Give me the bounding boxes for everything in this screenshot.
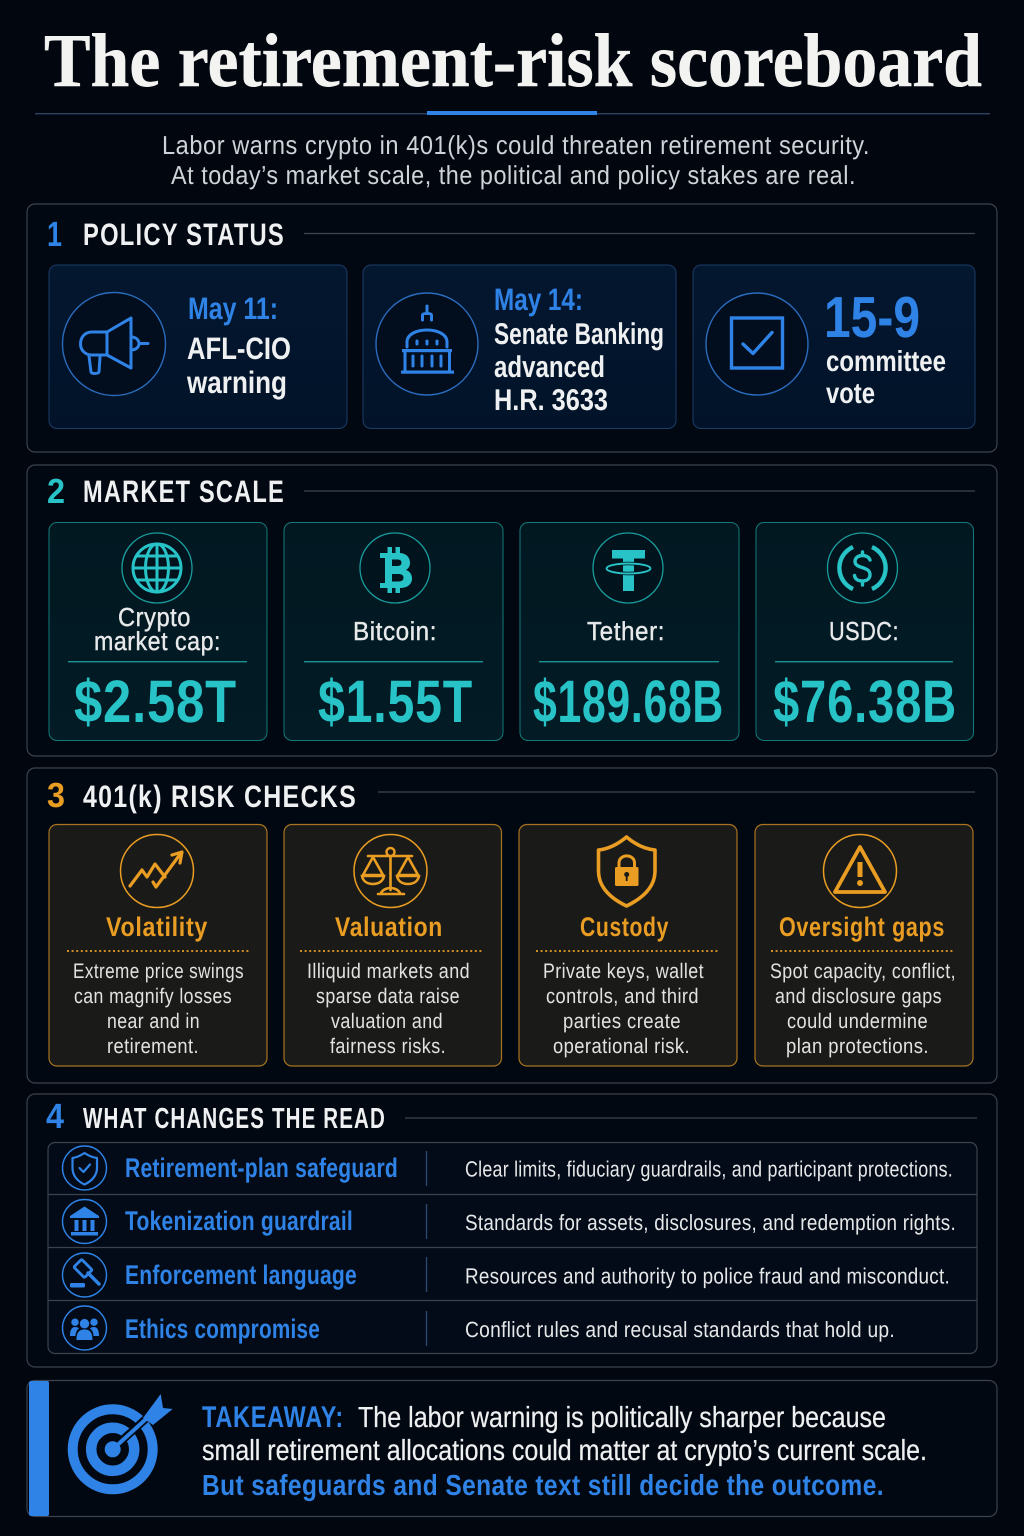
row: tokenization guardrail	[62, 1200, 956, 1244]
row: enforcement language	[62, 1253, 950, 1297]
card: volatility: near and in	[107, 1010, 200, 1033]
panel: market scale	[27, 465, 997, 756]
heading: risk checks	[47, 776, 975, 815]
card: 15-9 committee vote: vote	[826, 378, 875, 410]
card: valuation	[284, 824, 502, 1066]
title divider with blue accent	[35, 111, 990, 115]
card: crypto market cap: market cap:	[94, 626, 221, 656]
card: tether	[520, 522, 739, 740]
row: ethics compromise: Conflict rules and recusal standards that hold up.	[465, 1317, 895, 1342]
icon: megaphone	[62, 292, 166, 396]
card: crypto market cap: Crypto	[118, 602, 191, 632]
icon: gavel	[62, 1253, 106, 1297]
row: tokenization guardrail: Tokenization guardrail	[125, 1206, 353, 1236]
icon: balance scale	[354, 834, 427, 908]
card: May 11 AFL-CIO warning: May 11:	[188, 291, 278, 326]
heading: market scale	[47, 472, 975, 511]
card: custody: operational risk.	[553, 1035, 690, 1058]
accent bar	[29, 1381, 49, 1516]
subtitle: At today’s market scale, the political and policy stakes are real.	[171, 160, 856, 190]
takeaway text: TAKEAWAY:	[202, 1401, 344, 1434]
card: May 11 AFL-CIO warning: AFL-CIO	[187, 331, 291, 366]
row: retirement-plan safeguard: Retirement-plan safeguard	[125, 1153, 398, 1183]
card: valuation: fairness risks.	[330, 1035, 446, 1058]
row: enforcement language: Resources and authority to police fraud and misconduct.	[465, 1264, 950, 1288]
card: May 14 Senate Banking: H.R. 3633	[494, 384, 608, 417]
card: tether: Tether:	[587, 616, 665, 646]
card: 15-9 committee vote	[693, 265, 975, 428]
card: volatility	[49, 824, 267, 1066]
card: crypto market cap: $2.58T	[74, 668, 237, 735]
card: May 11 AFL-CIO warning	[49, 265, 347, 428]
card: May 14 Senate Banking: Senate Banking	[494, 318, 664, 351]
card: custody: Private keys, wallet	[543, 960, 704, 983]
card: May 14 Senate Banking: advanced	[494, 351, 605, 384]
subtitle: Labor warns crypto in 401(k)s could threaten retirement security.	[162, 130, 870, 160]
heading: risk checks: 3	[47, 776, 65, 815]
card: custody: controls, and third	[546, 985, 699, 1008]
heading: policy status: 1	[47, 215, 62, 254]
table frame	[48, 1142, 977, 1354]
heading: risk checks: 401(k) RISK CHECKS	[83, 779, 357, 814]
icon: warning triangle	[824, 834, 896, 908]
icon: shield with lock	[598, 837, 655, 906]
card: bitcoin: $1.55T	[318, 668, 473, 735]
card: custody: parties create	[563, 1010, 681, 1033]
heading: policy status	[47, 215, 975, 254]
icon: target with arrow	[73, 1394, 173, 1489]
card: USDC: $76.38B	[773, 668, 957, 735]
card: oversight gaps: Spot capacity, conflict,	[770, 960, 956, 983]
card: valuation: sparse data raise	[316, 985, 460, 1008]
card: valuation: Valuation	[335, 912, 443, 942]
icon: checkbox	[706, 293, 808, 395]
card: bitcoin: Bitcoin:	[353, 616, 437, 646]
row: ethics compromise	[62, 1306, 895, 1350]
card: May 11 AFL-CIO warning: warning	[186, 365, 287, 400]
takeaway text: small retirement allocations could matter at crypto’s current scale.	[202, 1435, 927, 1467]
card: volatility: can magnify losses	[74, 985, 232, 1008]
icon: bank	[62, 1200, 106, 1244]
panel: policy status	[27, 204, 997, 452]
icon: globe	[122, 533, 192, 603]
panel: takeaway	[27, 1380, 997, 1516]
row: ethics compromise: Ethics compromise	[125, 1314, 320, 1344]
card: oversight gaps	[755, 824, 973, 1066]
card: May 14 Senate Banking	[363, 265, 676, 428]
icon: people	[62, 1306, 106, 1350]
card: volatility: retirement.	[107, 1035, 199, 1058]
row: tokenization guardrail: Standards for assets, disclosures, and redemption rights.	[465, 1210, 956, 1235]
icon: capitol	[376, 293, 478, 395]
heading: policy status: POLICY STATUS	[83, 217, 285, 252]
card: crypto market cap	[49, 522, 267, 740]
icon: shield check	[62, 1146, 106, 1190]
icon: tether	[593, 533, 663, 603]
panel: what changes the read	[27, 1094, 997, 1367]
card: oversight gaps: plan protections.	[786, 1035, 929, 1058]
row: enforcement language: Enforcement language	[125, 1260, 357, 1290]
card: oversight gaps: could undermine	[787, 1010, 928, 1033]
card: 15-9 committee vote: 15-9	[824, 285, 920, 350]
card: custody	[519, 824, 737, 1066]
subtitle	[162, 130, 870, 190]
heading: what changes the read	[46, 1097, 977, 1136]
card: oversight gaps: Oversight gaps	[779, 912, 945, 942]
card: valuation: valuation and	[331, 1010, 443, 1033]
card: custody: Custody	[580, 912, 669, 942]
panel: 401(k) risk checks	[27, 768, 997, 1083]
card: tether: $189.68B	[533, 668, 724, 735]
row: retirement-plan safeguard	[62, 1146, 953, 1190]
icon: USDC	[828, 533, 898, 603]
card: volatility: Volatility	[106, 912, 208, 942]
card: USDC: USDC:	[829, 616, 899, 646]
card: valuation: Illiquid markets and	[307, 960, 470, 983]
heading: market scale: 2	[47, 472, 65, 511]
card: USDC	[756, 522, 974, 740]
card: May 14 Senate Banking: May 14:	[494, 282, 583, 317]
card: 15-9 committee vote: committee	[826, 346, 946, 378]
card: oversight gaps: and disclosure gaps	[775, 985, 942, 1008]
card: volatility: Extreme price swings	[73, 960, 244, 983]
heading: market scale: MARKET SCALE	[83, 474, 285, 509]
heading: what changes the read: 4	[46, 1097, 64, 1136]
takeaway text	[202, 1401, 927, 1502]
takeaway text: But safeguards and Senate text still decide the outcome.	[202, 1470, 884, 1502]
card: bitcoin	[284, 522, 503, 740]
icon: bitcoin	[360, 533, 430, 603]
heading: what changes the read: WHAT CHANGES THE READ	[83, 1103, 386, 1135]
takeaway text: The labor warning is politically sharper because	[358, 1402, 886, 1434]
icon: volatility chart	[120, 834, 194, 908]
